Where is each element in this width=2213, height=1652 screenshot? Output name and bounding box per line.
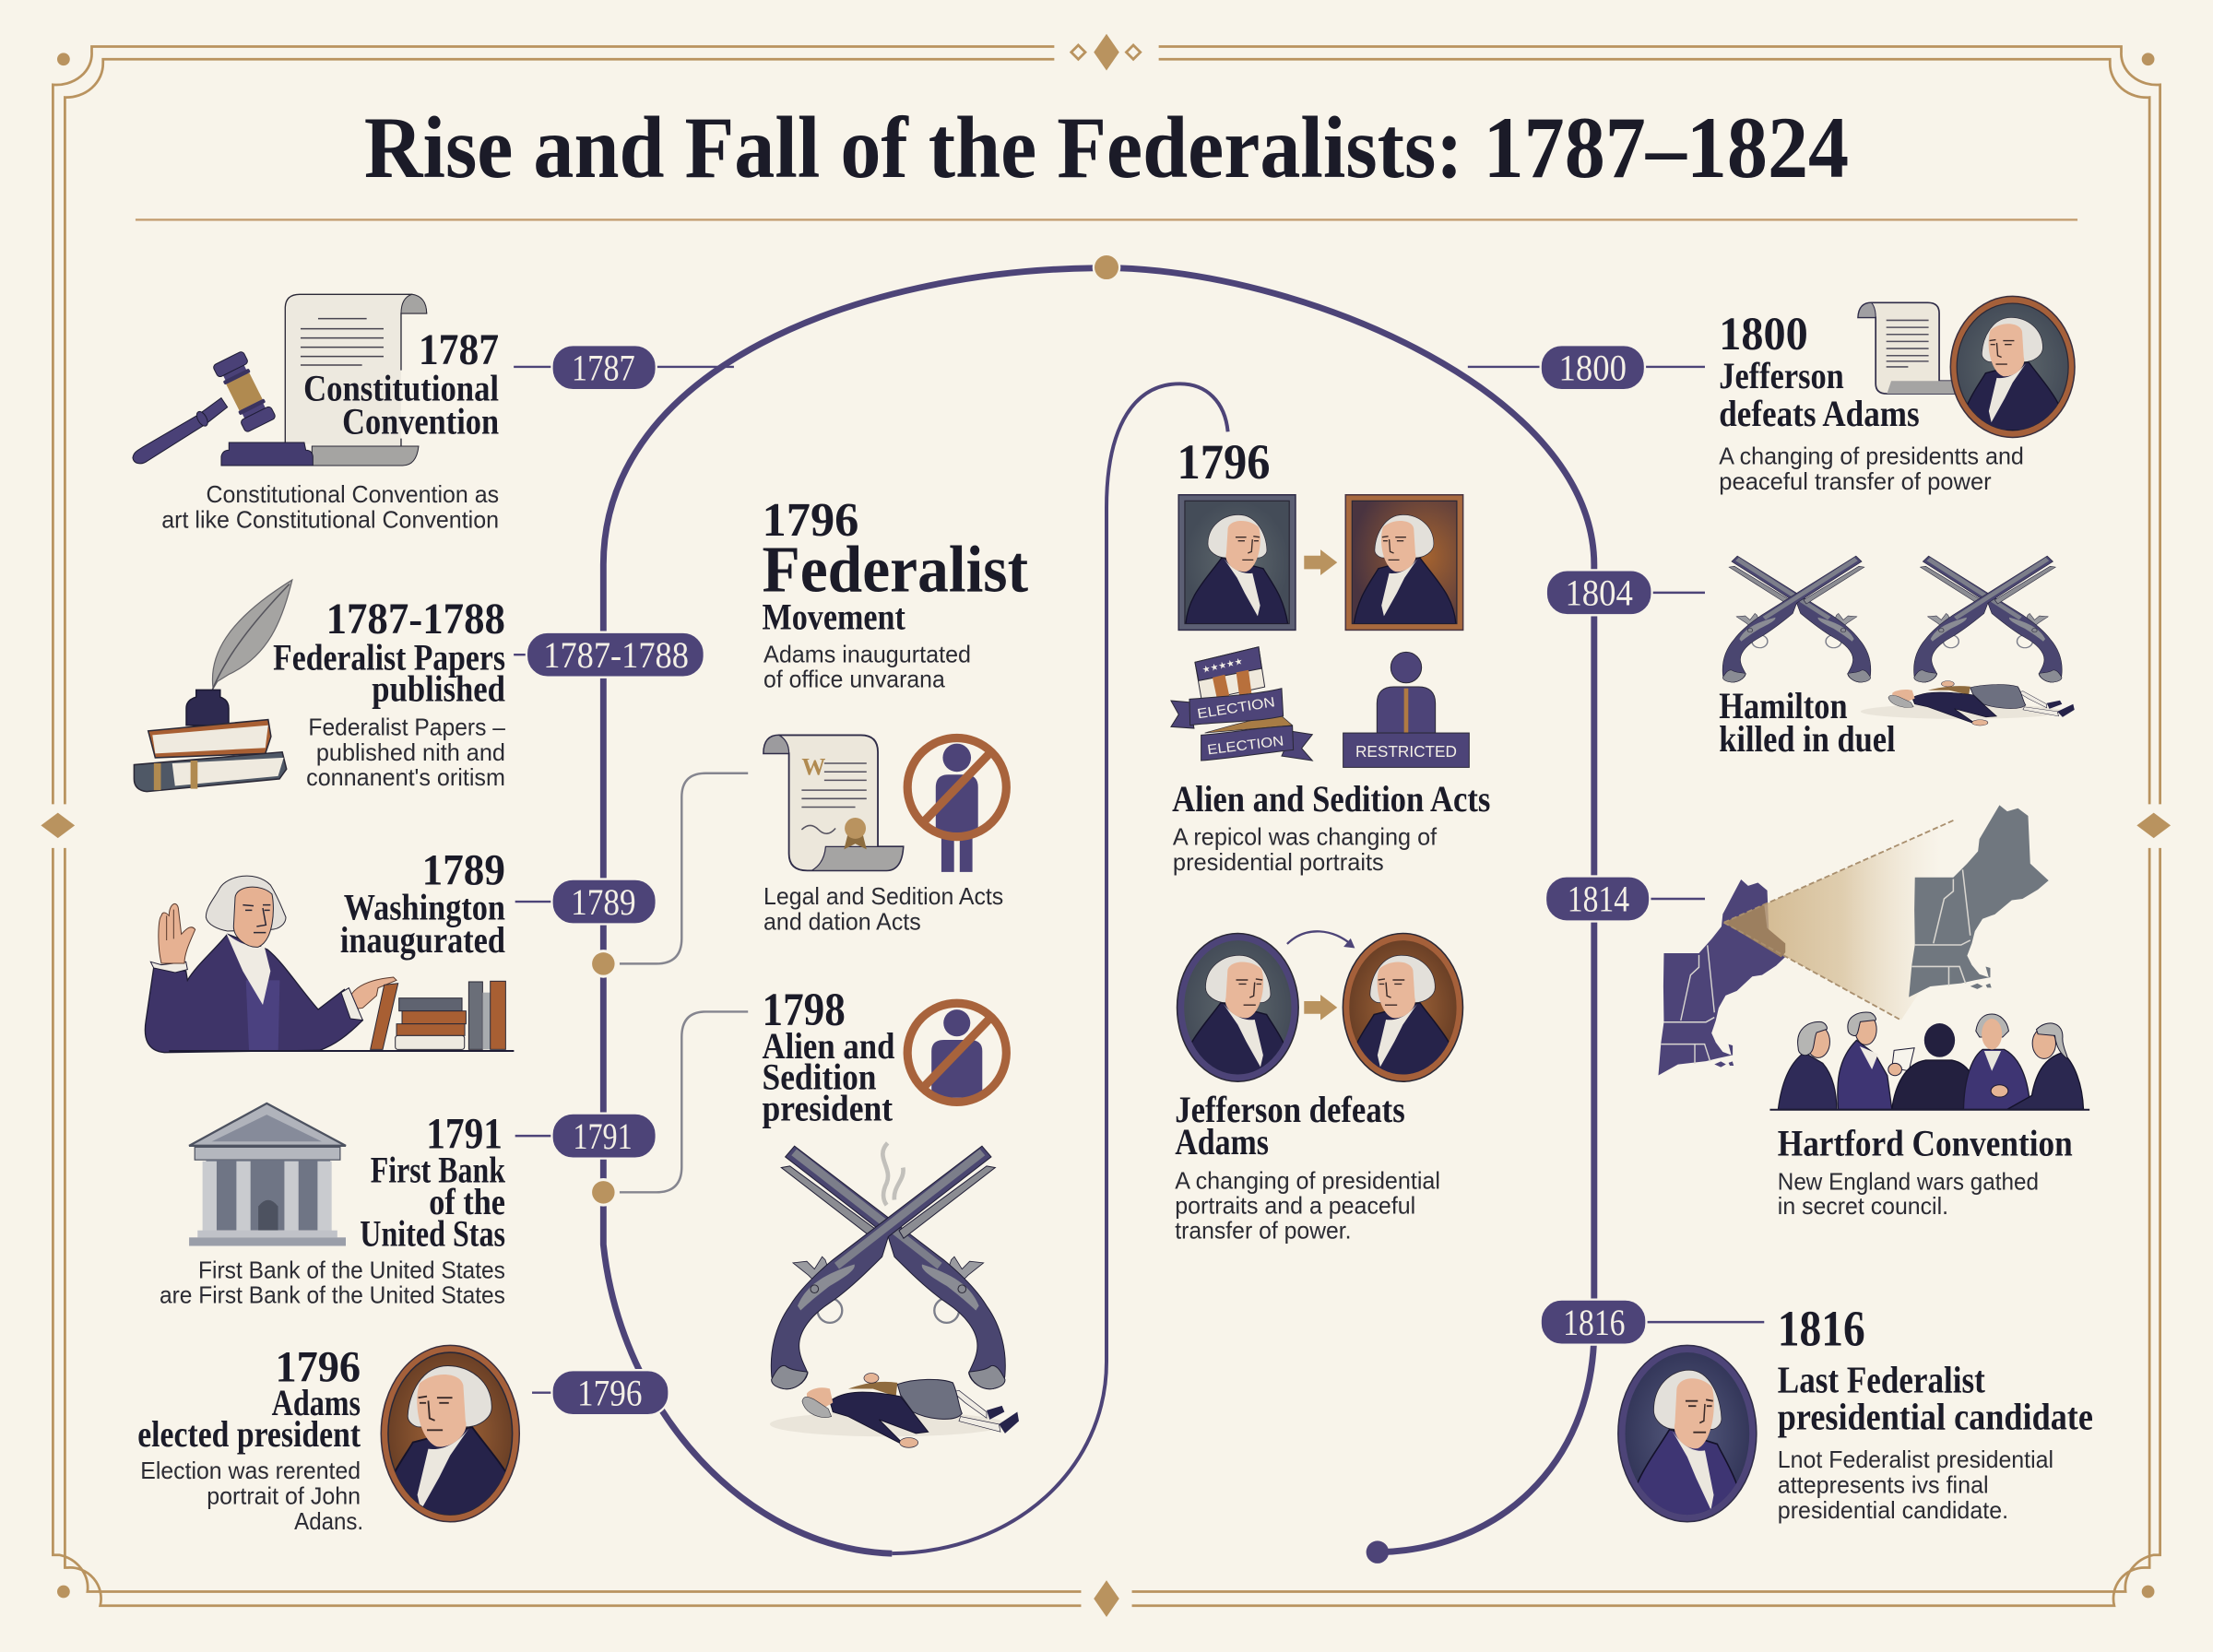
heading: 1791 First Bank of the United States xyxy=(360,1110,506,1254)
heading: 1796 Adams elected president xyxy=(137,1343,361,1455)
icon: quill, inkwell and books xyxy=(134,580,292,792)
heading: 1798 Alien and Sedition president: president xyxy=(763,1088,893,1128)
heading: 1791 First Bank of the United States: of the xyxy=(429,1182,505,1222)
description: art like Constitutional Convention xyxy=(161,505,499,533)
heading: Alien and Sedition Acts: Alien and Sedition Acts xyxy=(1172,779,1490,820)
description: Adams inaugurtated xyxy=(763,641,971,668)
portrait pair: framed presidents xyxy=(1178,495,1463,630)
heading: Hamilton killed in duel xyxy=(1719,686,1896,760)
heading: 1798 Alien and Sedition president: Sedition xyxy=(763,1057,877,1098)
event: 1800 Jefferson defeats Adams xyxy=(1719,296,2075,495)
heading: 1816 Last Federalist presidential candidate: Last Federalist xyxy=(1778,1359,1985,1401)
heading: 1791 First Bank of the United States: United Stas xyxy=(360,1214,505,1254)
description: First Bank of the United States xyxy=(198,1257,505,1284)
description xyxy=(1175,1167,1440,1244)
description xyxy=(1778,1446,2053,1524)
year: 1796 xyxy=(1178,434,1271,490)
icon: election banners: ★★★★★ xyxy=(1201,656,1244,676)
heading: 1787 Constitutional Convention xyxy=(303,326,499,442)
event: 1787-1788 Federalist Papers xyxy=(134,580,505,792)
date pills: 1787-1788 xyxy=(543,635,689,676)
icon: bank building xyxy=(189,1103,346,1245)
icon: fallen duelist xyxy=(770,1374,1019,1447)
heading: 1789 Washington inaugurated: inaugurated xyxy=(340,920,505,961)
description: Election was rerented xyxy=(140,1457,361,1484)
icon: crossed dueling pistols xyxy=(771,1143,1005,1389)
portrait pair: oval presidents xyxy=(1178,931,1462,1081)
heading: 1796 Adams elected president: Adams xyxy=(272,1383,361,1423)
heading: 1816 Last Federalist presidential candidate xyxy=(1778,1300,2093,1437)
description xyxy=(1778,1167,2039,1220)
icon: election banners xyxy=(1171,647,1312,761)
icon: dueling pistols pair two xyxy=(1914,556,2062,682)
icon: scroll and gavel xyxy=(133,294,427,466)
heading: 1796 Adams elected president: 1796 xyxy=(275,1343,361,1391)
heading: 1796 Adams elected president: elected president xyxy=(137,1414,361,1455)
icon: Washington swearing oath xyxy=(145,876,514,1053)
description: in secret council. xyxy=(1778,1192,1948,1220)
heading: 1791 First Bank of the United States: 1791 xyxy=(426,1110,503,1158)
title: Rise and Fall of the Federalists: 1787–1824 xyxy=(364,99,1849,196)
description xyxy=(160,1257,505,1308)
heading: 1787 Constitutional Convention: Convention xyxy=(342,402,499,442)
description: A repicol was changing of xyxy=(1173,822,1438,850)
heading: 1798 Alien and Sedition president: Alien and xyxy=(763,1026,894,1067)
event: 1816 Last Federalist candidate xyxy=(1618,1300,2093,1524)
icon: prohibited person xyxy=(907,1003,1006,1102)
description: presidential candidate. xyxy=(1778,1496,2008,1524)
heading: 1800 Jefferson defeats Adams: Jefferson xyxy=(1719,356,1844,396)
heading: Hartford Convention: Hartford Convention xyxy=(1778,1124,2073,1164)
description: Lnot Federalist presidential xyxy=(1778,1446,2053,1473)
icon: scroll xyxy=(1858,302,1962,394)
event: 1791 First Bank xyxy=(160,1103,506,1308)
heading: Hamilton killed in duel: Hamilton xyxy=(1719,686,1848,726)
heading: Jefferson defeats Adams: Jefferson defeats xyxy=(1175,1090,1405,1130)
panel: 1796 Federalist Movement xyxy=(763,494,1028,936)
heading: 1796 Federalist Movement: Federalist xyxy=(763,532,1028,606)
icon: restricted figure: RESTRICTED xyxy=(1355,742,1457,761)
event: 1787 Constitutional Convention xyxy=(133,294,499,533)
icon: restricted figure xyxy=(1343,652,1469,767)
caption: and dation Acts xyxy=(763,908,921,936)
description: transfer of power. xyxy=(1175,1216,1352,1244)
description xyxy=(1719,442,2024,495)
description: connanent's oritism xyxy=(306,763,505,791)
description xyxy=(161,480,499,533)
heading: 1796 Federalist Movement: 1796 xyxy=(763,494,858,547)
heading: 1816 Last Federalist presidential candidate: 1816 xyxy=(1778,1300,1865,1356)
portrait: John Adams xyxy=(378,1345,523,1522)
heading: 1800 Jefferson defeats Adams: 1800 xyxy=(1719,308,1808,360)
heading: 1787 Constitutional Convention: 1787 xyxy=(419,326,499,374)
event: 1814 Hartford Convention xyxy=(1658,805,2089,1220)
panel: Jefferson defeats Adams portraits xyxy=(1175,931,1462,1244)
heading: 1798 Alien and Sedition president: 1798 xyxy=(763,984,846,1035)
description xyxy=(140,1457,363,1535)
connector lines xyxy=(514,367,1764,1393)
date pills: 1800 xyxy=(1559,348,1627,388)
heading: Hamilton killed in duel: killed in duel xyxy=(1719,719,1896,760)
heading: 1787-1788 Federalist Papers published: Federalist Papers xyxy=(273,637,505,678)
description: peaceful transfer of power xyxy=(1719,467,1992,495)
heading: 1789 Washington inaugurated xyxy=(340,847,505,961)
description: are First Bank of the United States xyxy=(160,1280,505,1308)
date pills: 1816 xyxy=(1563,1303,1626,1343)
heading: 1816 Last Federalist presidential candidate: presidential candidate xyxy=(1778,1395,2093,1437)
event: 1796 Adams elected president xyxy=(137,1343,523,1535)
panel: 1798 Alien and Sedition xyxy=(763,984,1019,1447)
portrait: last Federalist candidate xyxy=(1618,1345,1757,1522)
timeline spine xyxy=(603,268,1594,1553)
description: A changing of presidentts and xyxy=(1719,442,2024,470)
heading: 1798 Alien and Sedition president xyxy=(763,984,894,1128)
icon: fallen Hamilton xyxy=(1861,681,2075,726)
description: attepresents ivs final xyxy=(1778,1470,1989,1498)
date pills: 1804 xyxy=(1565,573,1633,614)
heading: 1796 Federalist Movement: Movement xyxy=(763,597,906,638)
description: Constitutional Convention as xyxy=(206,480,499,508)
heading: 1800 Jefferson defeats Adams: defeats Adams xyxy=(1719,394,1920,434)
date pills: 1787 xyxy=(572,348,635,388)
icon: prohibited person xyxy=(907,738,1006,872)
description xyxy=(763,641,971,692)
heading: 1800 Jefferson defeats Adams xyxy=(1719,308,1920,434)
heading: Jefferson defeats Adams xyxy=(1175,1090,1405,1162)
caption: Legal and Sedition Acts xyxy=(763,882,1003,910)
caption xyxy=(763,882,1003,936)
heading: Jefferson defeats Adams: Adams xyxy=(1175,1122,1269,1162)
heading: 1791 First Bank of the United States: First Bank xyxy=(371,1150,506,1191)
event: 1789 Washington inaugurated xyxy=(145,847,514,1053)
heading: 1789 Washington inaugurated: 1789 xyxy=(422,847,505,895)
event: 1804 Hamilton killed in duel xyxy=(1719,556,2075,760)
date pills: 1814 xyxy=(1568,879,1629,920)
date pills xyxy=(527,345,1652,1415)
description: Federalist Papers – xyxy=(308,713,505,740)
heading: 1787-1788 Federalist Papers published xyxy=(273,596,505,710)
icon: New England map and spotlight xyxy=(1658,805,2049,1075)
description: A changing of presidential xyxy=(1175,1167,1440,1195)
icon: dueling pistols pair one xyxy=(1722,556,1871,682)
icon: legal document with seal xyxy=(763,735,904,870)
icon: secret council figures xyxy=(1769,1012,2089,1110)
description: presidential portraits xyxy=(1173,848,1384,876)
icon: election banners: ELECTION xyxy=(1206,733,1284,758)
heading: 1787 Constitutional Convention: Constitutional xyxy=(303,369,499,409)
date pills: 1791 xyxy=(573,1116,633,1157)
description: New England wars gathed xyxy=(1778,1167,2039,1195)
description: of office unvarana xyxy=(763,665,945,692)
icon: election banners: ELECTION xyxy=(1196,694,1276,722)
description: portrait of John xyxy=(207,1482,361,1510)
heading: 1796 Federalist Movement xyxy=(763,494,1028,638)
heading: 1789 Washington inaugurated: Washington xyxy=(344,887,505,927)
panel: 1796 Alien and Sedition Acts xyxy=(1171,434,1490,876)
heading: 1787-1788 Federalist Papers published: 1787-1788 xyxy=(326,596,505,643)
description: portraits and a peaceful xyxy=(1175,1191,1415,1219)
date pills: 1796 xyxy=(577,1373,642,1413)
portrait: Jefferson xyxy=(1950,296,2075,437)
timeline nodes xyxy=(589,254,1389,1564)
description xyxy=(1173,822,1438,876)
date pills: 1789 xyxy=(571,882,636,923)
description: published nith and xyxy=(316,738,505,766)
icon: legal document with seal: W xyxy=(801,753,825,780)
description: Adans. xyxy=(294,1507,363,1535)
heading: 1787-1788 Federalist Papers published: published xyxy=(372,669,505,710)
description xyxy=(306,713,505,791)
